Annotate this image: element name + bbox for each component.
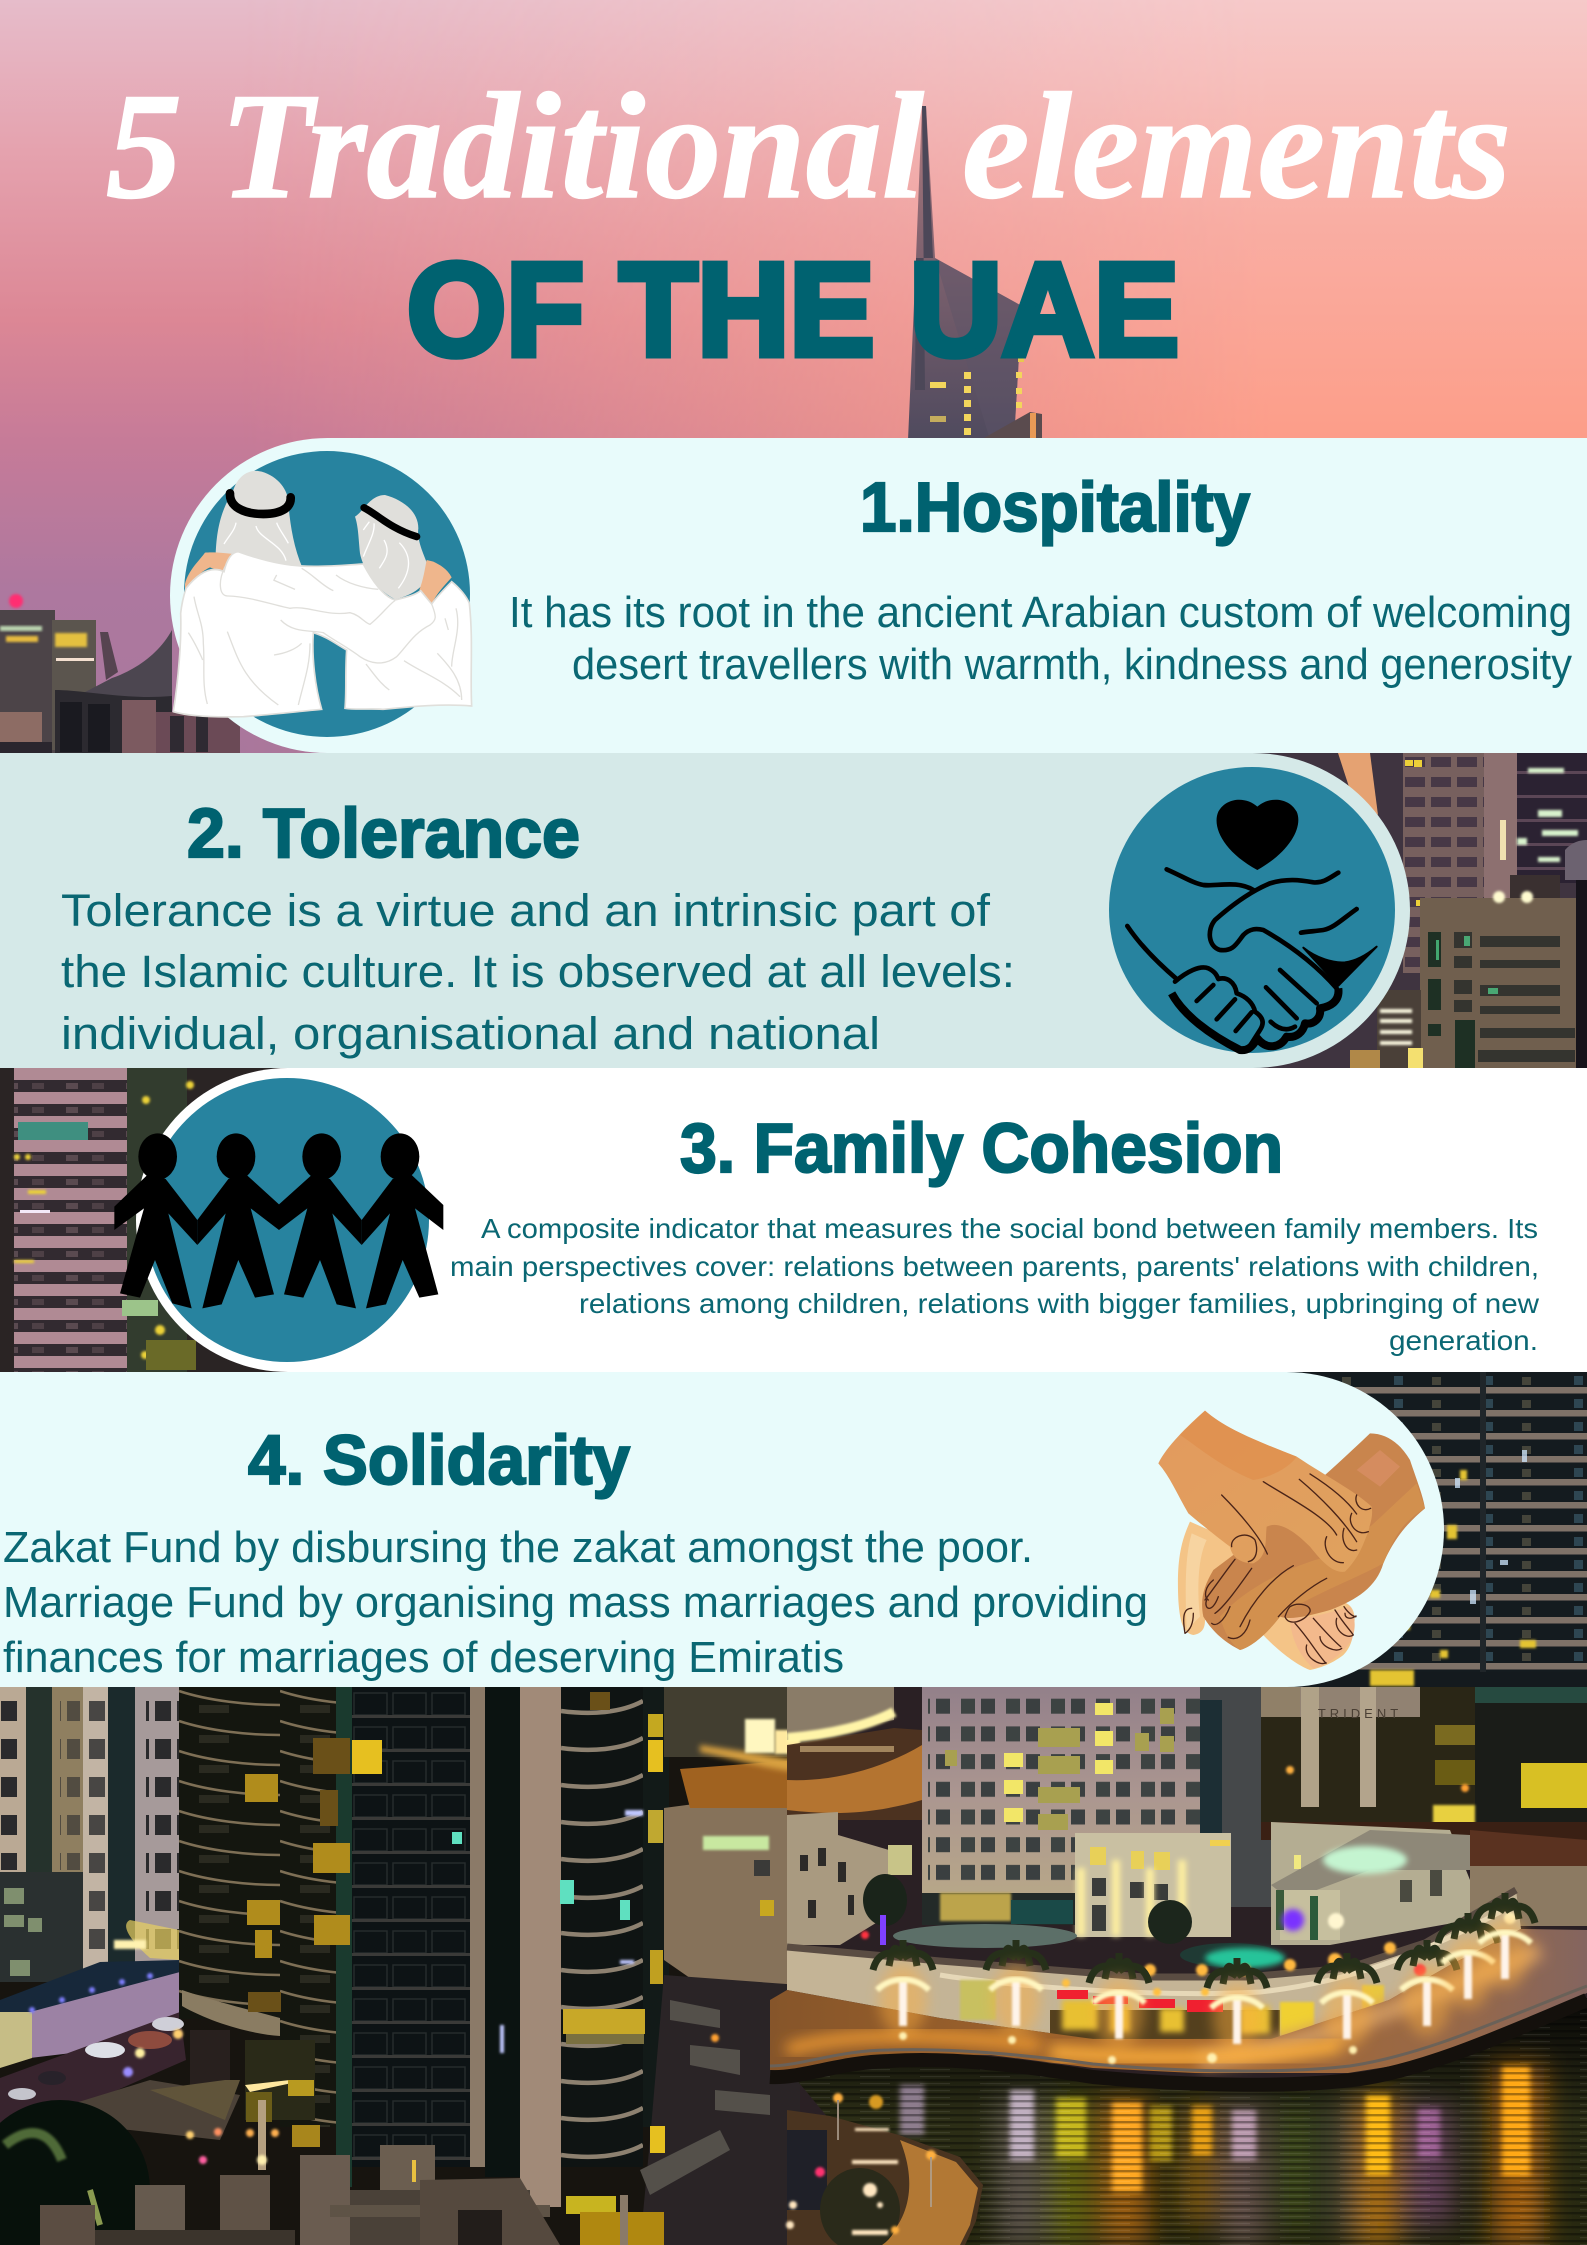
buildings left of panel 3	[0, 1068, 300, 1372]
heading: 3. Family Cohesion: 3. Family Cohesion	[680, 1109, 1283, 1187]
text block: family cohesion description	[450, 1213, 1540, 1356]
curved podium wall	[787, 1890, 1521, 2042]
text block: solidarity description	[3, 1523, 1148, 1682]
Trident building: TRIDENT	[1318, 1706, 1402, 1721]
main residential tower	[787, 1687, 1271, 1937]
pool and palms on terrace	[861, 1900, 1285, 1968]
panel 1: hospitality	[170, 438, 1587, 753]
text block: tolerance description: Tolerance is a virtue and an intrinsic part of	[61, 885, 991, 936]
icon circle	[1109, 767, 1395, 1053]
heading: 2. Tolerance: 2. Tolerance	[187, 794, 580, 872]
text block: solidarity description: finances for marriages of deserving Emiratis	[3, 1633, 844, 1682]
panel 4: solidarity	[0, 1372, 1444, 1687]
sky gradient	[0, 0, 1587, 760]
icon circle	[184, 451, 470, 737]
panel background	[0, 753, 1410, 1068]
title line 1: script: 5 Traditional elements	[106, 62, 1511, 230]
text block: family cohesion description: A composite indicator that measures the social bond between family members. Its	[481, 1213, 1538, 1244]
light palms along the waterfront	[873, 1893, 1535, 2064]
skyscraper with spire	[908, 106, 1042, 440]
promenade	[770, 1929, 1587, 2073]
low villas	[40, 2145, 560, 2245]
palm trees corner	[0, 2100, 150, 2245]
text block: hospitality description	[509, 588, 1572, 689]
heading: 1.Hospitality: 1.Hospitality	[860, 468, 1250, 546]
icon circle	[145, 1078, 429, 1362]
text block: tolerance description	[61, 885, 1015, 1059]
text block: tolerance description: the Islamic culture. It is observed at all levels:	[61, 946, 1015, 997]
lower promenade	[786, 2093, 983, 2245]
text block: tolerance description: individual, organisational and national	[61, 1008, 880, 1059]
panel background	[0, 1372, 1444, 1687]
panel background	[170, 438, 1587, 753]
title	[106, 62, 1511, 383]
left and right villas	[787, 1812, 1470, 1945]
water with reflections	[770, 1986, 1587, 2245]
text block: family cohesion description: generation.	[1389, 1325, 1538, 1356]
text block: family cohesion description: relations among children, relations with bigger families, upbringing of new	[579, 1288, 1540, 1319]
icon: clasped hands	[1158, 1411, 1425, 1670]
icon: two men embracing	[173, 471, 472, 717]
title line 2: OF THE UAE: OF THE UAE	[407, 236, 1179, 383]
text block: family cohesion description: main perspectives cover: relations between parents, parents' relations with children,	[450, 1251, 1539, 1282]
left skyline	[0, 594, 240, 754]
street cars	[8, 2017, 184, 2100]
text block: solidarity description: Marriage Fund by organising mass marriages and providing	[3, 1578, 1148, 1627]
lit tower windows	[245, 1692, 719, 2245]
heading: 4. Solidarity: 4. Solidarity	[248, 1421, 630, 1499]
text block: hospitality description: It has its root in the ancient Arabian custom of welcoming	[509, 588, 1572, 637]
entrance lights	[186, 2040, 320, 2170]
buildings right of panel 4	[1280, 1372, 1587, 1688]
buildings right of panel 2	[1250, 753, 1587, 1069]
panel background	[136, 1068, 1587, 1372]
icon: paper doll chain	[114, 1133, 443, 1308]
panel 2: tolerance	[0, 753, 1410, 1068]
bottom left tower block	[0, 1687, 1587, 2245]
panel 3: family cohesion	[114, 1068, 1587, 1372]
text block: solidarity description: Zakat Fund by disbursing the zakat amongst the poor.	[3, 1523, 1033, 1572]
Trident building	[1261, 1687, 1587, 1926]
icon: handshake with heart	[1127, 800, 1377, 1050]
